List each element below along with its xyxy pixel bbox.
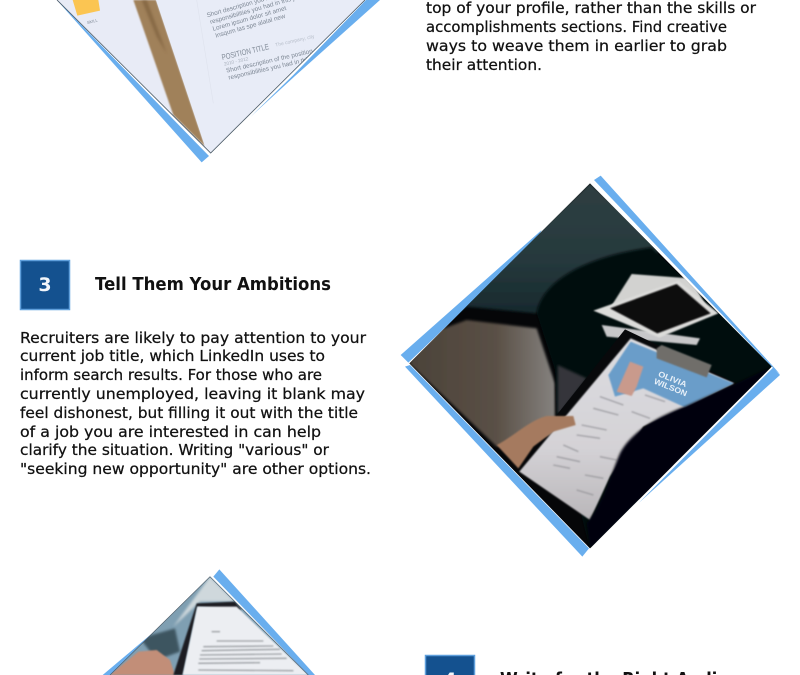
photo: clipboard scene bbox=[407, 180, 773, 550]
body text: tip 3: currently unemployed, leaving it blank may bbox=[20, 385, 365, 403]
body text: tip 2 ending bbox=[426, 0, 757, 74]
photo: resume page: 2010 - 2012 bbox=[223, 56, 249, 67]
photo: resume page: responsibilities you had in this position bbox=[228, 50, 335, 82]
body text: tip 3: of a job you are interested in can help bbox=[20, 423, 321, 441]
photo: clipboard scene: WILSON bbox=[653, 377, 689, 398]
photo edge: bottom diamond bbox=[110, 577, 308, 675]
photo edge: top diamond bbox=[57, 0, 365, 153]
photo: resume page bbox=[50, 0, 373, 157]
photo: resume page: POSITION TITLE bbox=[221, 42, 270, 62]
body text: tip 3: inform search results. For those who are bbox=[20, 366, 322, 384]
accent stripes: top diamond bbox=[57, 0, 380, 162]
photo: resume page: SKILL bbox=[86, 17, 99, 25]
heading: tip 3: Tell Them Your Ambitions bbox=[95, 275, 331, 295]
number badge: 4 bbox=[426, 656, 474, 675]
body text: tip 3: "seeking new opportunity" are other options. bbox=[20, 460, 371, 478]
photo: resume page: The company, city bbox=[275, 34, 316, 49]
photo: resume page: Lorem ipsum dolor sit amet bbox=[212, 5, 287, 33]
image: resume with wood strip (top diamond) bbox=[50, 0, 380, 162]
accent stripes: middle diamond bbox=[401, 176, 780, 557]
photo: document bbox=[107, 573, 313, 675]
body text: tip 3: feel dishonest, but filling it out with the title bbox=[20, 404, 358, 422]
number badge: 3: 3 bbox=[38, 274, 52, 296]
body text: tip 3: current job title, which LinkedIn uses to bbox=[20, 347, 325, 365]
body text: tip 2 ending: accomplishments sections. Find creative bbox=[426, 18, 727, 36]
image: hand and paper document (bottom diamond) bbox=[103, 569, 315, 675]
body text: tip 2 ending: ways to weave them in earlier to grab bbox=[426, 37, 727, 55]
photo: clipboard scene: OLIVIA bbox=[657, 370, 688, 389]
image: hand holding resume on clipboard (middle diamond) bbox=[401, 176, 780, 557]
body text: tip 3: Recruiters are likely to pay attention to your bbox=[20, 329, 367, 347]
accent stripes: bottom diamond bbox=[103, 569, 315, 675]
photo: resume page: Short description of the position and the bbox=[226, 43, 336, 75]
photo: resume page: Insqum las spe alalal new bbox=[215, 13, 287, 40]
body text: tip 3 bbox=[20, 329, 371, 478]
number badge: 3 bbox=[20, 260, 70, 310]
body text: tip 2 ending: their attention. bbox=[426, 56, 542, 74]
body text: tip 3: clarify the situation. Writing "various" or bbox=[20, 441, 330, 459]
